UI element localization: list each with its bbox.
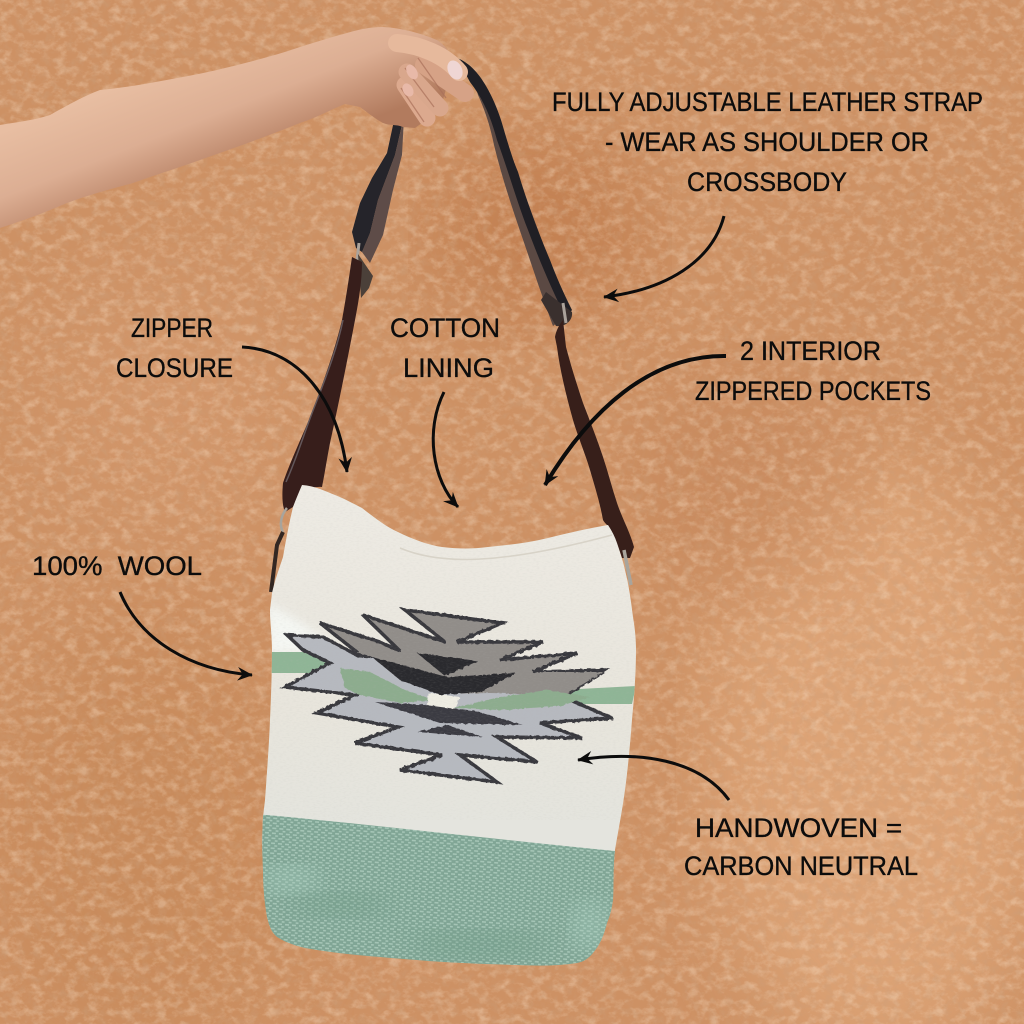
- callout: adjustable strap: - WEAR AS SHOULDER OR: [605, 127, 929, 157]
- callout: handwoven: HANDWOVEN =: [695, 813, 902, 843]
- forearm and palm: [0, 27, 454, 228]
- callout: handwoven: [578, 756, 918, 881]
- fingernails: [444, 58, 466, 82]
- dark centre triangle: [417, 653, 478, 676]
- callout: cotton lining: LINING: [403, 353, 494, 383]
- woven diamond motif: [285, 610, 612, 782]
- light grey lower layer: [285, 635, 612, 782]
- callout: interior pockets: [545, 336, 931, 485]
- callout: cotton lining: [390, 313, 500, 507]
- woven bag: [255, 480, 645, 975]
- tab: [358, 254, 373, 298]
- bag cream body: [255, 480, 645, 860]
- dark centre crescent: [372, 657, 517, 695]
- callout: zipper closure: [116, 313, 347, 472]
- fingers: [405, 85, 427, 118]
- mint band at the bottom: [262, 814, 615, 966]
- callout: adjustable strap: FULLY ADJUSTABLE LEATHER STRAP: [552, 87, 983, 117]
- arm and hand: [0, 27, 466, 228]
- callout: interior pockets: 2 INTERIOR: [740, 336, 881, 366]
- mint centre band: [340, 668, 590, 710]
- callout: cotton lining: COTTON: [390, 313, 500, 343]
- strap: [271, 58, 634, 592]
- callout: handwoven: CARBON NEUTRAL: [684, 851, 918, 881]
- callout: zipper closure: CLOSURE: [116, 353, 233, 383]
- lower left strap: [282, 257, 362, 512]
- callout: adjustable strap: [552, 87, 983, 297]
- callout: wool: [32, 551, 252, 675]
- callout: interior pockets: ZIPPERED POCKETS: [695, 376, 931, 406]
- upper left strap loop: [362, 117, 404, 263]
- mint side stripes: [272, 652, 326, 673]
- taupe upper layer: [320, 610, 603, 695]
- right metal ring: [624, 550, 631, 585]
- callout: wool: 100% WOOL: [32, 551, 202, 581]
- upper right strap: [470, 66, 571, 326]
- dark lower triangle: [417, 725, 483, 737]
- left metal ring and cord: [281, 508, 287, 532]
- bag top seam: [400, 535, 612, 559]
- strap buckles: [357, 243, 566, 323]
- callout: zipper closure: ZIPPER: [131, 313, 213, 343]
- callout: adjustable strap: CROSSBODY: [687, 167, 847, 197]
- dark lower band: [375, 702, 523, 725]
- weave texture: [286, 610, 608, 784]
- white centre diamond: [427, 693, 460, 709]
- lower right strap: [555, 320, 634, 558]
